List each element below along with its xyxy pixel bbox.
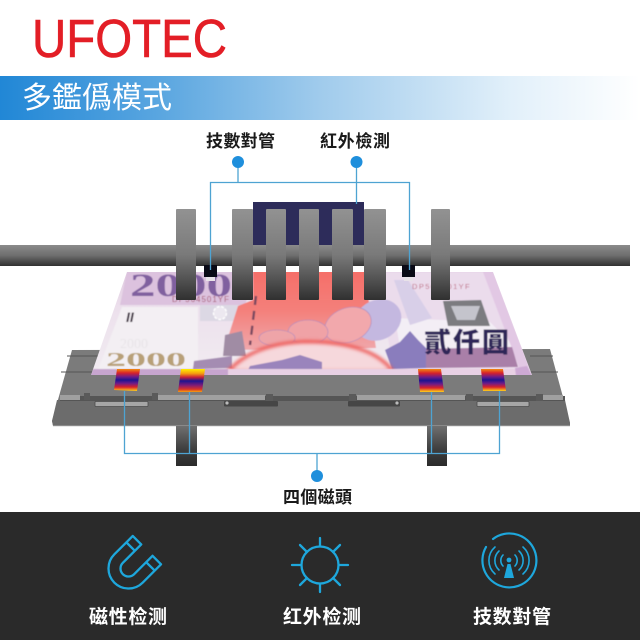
icon: magnet — [100, 536, 161, 597]
note: dish illustration — [258, 300, 402, 346]
label: counting sensor: 技數對管 — [206, 131, 275, 151]
note: left serial number: DP564501YF — [172, 295, 230, 304]
left counting sensor — [204, 265, 217, 281]
device tray — [52, 349, 570, 426]
shaft — [0, 245, 630, 266]
heat sensor strip 4 — [481, 369, 506, 391]
note: tan 2000 numeral: 2000 — [106, 349, 186, 371]
note: dome glow — [228, 342, 393, 372]
tray rail bars — [60, 393, 565, 401]
rollers — [176, 209, 450, 300]
header band — [0, 73, 640, 120]
note: red infrared glow — [228, 272, 376, 350]
logo: UFOTEC: UFOTEC — [32, 9, 227, 69]
heat sensor strip 3 — [418, 369, 444, 392]
label: infrared detection: 红外检测 — [283, 605, 361, 628]
right counting sensor — [402, 265, 415, 281]
note: mauve pattern — [426, 347, 518, 368]
note: light beam — [394, 280, 432, 325]
note: bottom right corner — [515, 366, 532, 376]
callout dot: counting sensor — [232, 156, 244, 168]
note: left light panel — [110, 307, 198, 344]
infrared navy panel — [253, 202, 364, 246]
callout dot: magnetic heads — [311, 470, 323, 482]
note: white mid area — [395, 318, 516, 348]
callout lines: top sensors — [210, 162, 410, 270]
icon: signal tower — [482, 533, 536, 587]
note: right serial number: DP564501YF — [412, 282, 471, 291]
note: building pattern — [193, 356, 232, 369]
header title: 多鑑僞模式 — [22, 73, 172, 117]
note: blue mountain pattern — [385, 331, 428, 369]
note: bottom pale strip — [228, 369, 528, 376]
label: four magnetic heads: 四個磁頭 — [283, 488, 352, 507]
heat sensor strip 1 — [114, 369, 140, 391]
note: rosette — [200, 305, 242, 321]
callout dot: infrared — [350, 156, 362, 168]
note: dome town — [248, 355, 322, 370]
right support leg — [427, 426, 447, 466]
note: denomination characters: 貳仟圓 — [424, 321, 509, 360]
bottom dark panel — [0, 512, 640, 640]
note: large 2000 numeral: 2000 — [130, 268, 232, 304]
left support leg — [176, 426, 197, 466]
note: right light side — [386, 272, 518, 369]
callout lines: magnetic heads — [124, 391, 500, 476]
note: hologram patch — [443, 300, 490, 326]
note: watermark: 2000 — [120, 337, 148, 352]
icon: sun — [292, 538, 348, 592]
note: II mark: II — [126, 309, 135, 325]
heat sensor strip 2 — [178, 369, 205, 392]
note: dark dashed security thread — [250, 296, 256, 345]
note: bottom purple strip — [90, 369, 228, 376]
note: tower — [223, 331, 246, 356]
note: upper purple number band — [120, 272, 255, 305]
label: magnetic detection: 磁性检测 — [89, 605, 167, 628]
banknote — [91, 272, 532, 375]
label: infrared detection: 紅外檢測 — [320, 131, 390, 151]
note: right edge strip — [483, 272, 532, 375]
tray slots — [95, 401, 529, 406]
label: counting sensor: 技数對管 — [473, 605, 551, 628]
